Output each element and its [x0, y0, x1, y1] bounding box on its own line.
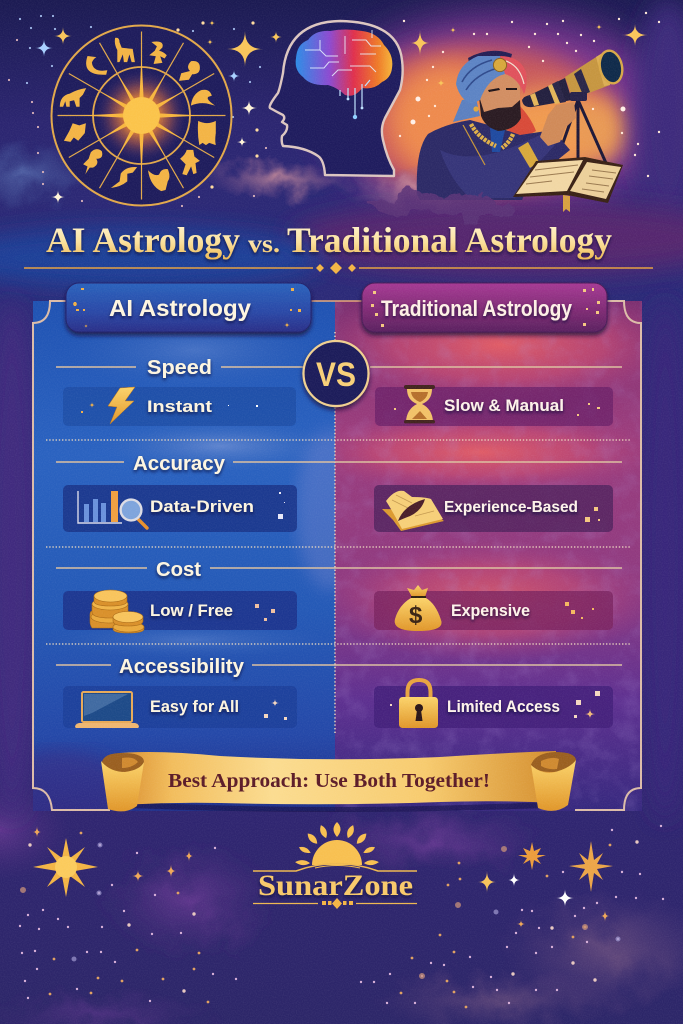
section: Accuracy: [56, 453, 622, 532]
AI row: Data-Driven: Data-Driven: [150, 497, 254, 516]
face: [478, 70, 520, 126]
icon: four-point gold star: [478, 871, 496, 893]
row dividers: [46, 440, 630, 644]
panel: Traditional side background: [335, 301, 642, 811]
banner: best approach scroll: [101, 751, 576, 812]
main title: [46, 220, 612, 260]
turban: [468, 51, 512, 66]
astrologer with telescope and book: [370, 49, 625, 217]
book: [513, 157, 623, 212]
main title: AI Astrology: [46, 220, 240, 260]
icon: book and quill: [382, 491, 444, 531]
frame border: [33, 301, 641, 810]
heading: Speed: Speed: [147, 357, 212, 379]
scroll left roll: [101, 753, 144, 811]
banner text: Best Approach: Use Both Together!: [168, 770, 490, 792]
AI row: Instant: [63, 387, 296, 426]
heading: Cost: Cost: [156, 559, 201, 581]
panel: AI side background: [33, 301, 335, 811]
scroll right roll: [531, 752, 576, 811]
Traditional row: Experience-Based: [374, 485, 613, 532]
icon: hourglass: [404, 385, 435, 423]
zodiac signs: [60, 38, 216, 191]
icon: orange eight-point star: [518, 842, 546, 870]
cuff: [518, 142, 539, 168]
icon: money bag: $: [409, 602, 423, 629]
robe: [417, 120, 570, 200]
VS badge: [304, 341, 368, 406]
main title: vs.: [248, 231, 280, 258]
title divider: [24, 262, 653, 274]
footer stars and sparkles: [20, 826, 663, 1007]
heading: Accessibility: Accessibility: [119, 656, 245, 678]
Traditional row: Expensive: [374, 585, 613, 631]
turban back and scarf: [505, 100, 536, 140]
main title: Traditional Astrology: [287, 220, 612, 260]
sun rays: [82, 56, 202, 176]
Traditional row: Limited Access: Limited Access: [447, 697, 560, 716]
telescope: [522, 49, 625, 107]
heading: Accuracy: Accuracy: [133, 453, 226, 475]
Traditional row: Limited Access: [374, 680, 613, 728]
icon: bar chart with magnifier: [78, 491, 147, 528]
section: Cost: [56, 559, 622, 633]
icon: padlock: [399, 680, 438, 728]
AI row: Low / Free: Low / Free: [150, 601, 233, 620]
section: Accessibility: [56, 656, 622, 728]
AI row: Data-Driven: [63, 485, 297, 532]
logo wordmark: SunarZone: [258, 869, 413, 902]
Traditional row: Slow & Manual: [375, 385, 613, 426]
AI row: Easy for All: Easy for All: [150, 697, 239, 716]
tripod: [557, 100, 606, 163]
panel: comparison frame: [32, 300, 642, 811]
Traditional Astrology header button: Traditional Astrology: [381, 296, 573, 321]
icon: gold coins: [90, 590, 144, 633]
zodiac wheel: [52, 26, 232, 206]
AI Astrology header button: [66, 283, 311, 332]
icon: large tall gold star: [569, 841, 613, 892]
icon: left gold sun star: [33, 838, 98, 897]
section: Speed: [56, 357, 622, 426]
icon: lightning bolt: [108, 387, 135, 424]
brain: [296, 30, 392, 119]
logo: SunarZone: [253, 822, 417, 909]
cloud over robe base: [370, 193, 510, 217]
necklace: [471, 124, 513, 148]
logo sun: [295, 822, 379, 866]
AI row: Instant: Instant: [147, 397, 212, 416]
AI Astrology header button: AI Astrology: [109, 295, 251, 321]
icon: money bag: [395, 585, 442, 631]
VS badge: VS: [316, 356, 356, 394]
centre dotted line: [334, 332, 336, 733]
Traditional row: Expensive: Expensive: [451, 601, 530, 620]
hand: [540, 102, 576, 146]
background stars: top area: [9, 13, 659, 206]
AI head silhouette with brain: [270, 21, 403, 176]
AI row: Easy for All: [63, 686, 297, 728]
Traditional row: Experience-Based: Experience-Based: [444, 499, 578, 516]
icon: laptop: [75, 692, 139, 728]
AI row: Low / Free: [63, 590, 297, 633]
Traditional Astrology header button: [362, 283, 607, 332]
Traditional row: Slow & Manual: Slow & Manual: [444, 396, 564, 415]
beard: [479, 96, 521, 131]
